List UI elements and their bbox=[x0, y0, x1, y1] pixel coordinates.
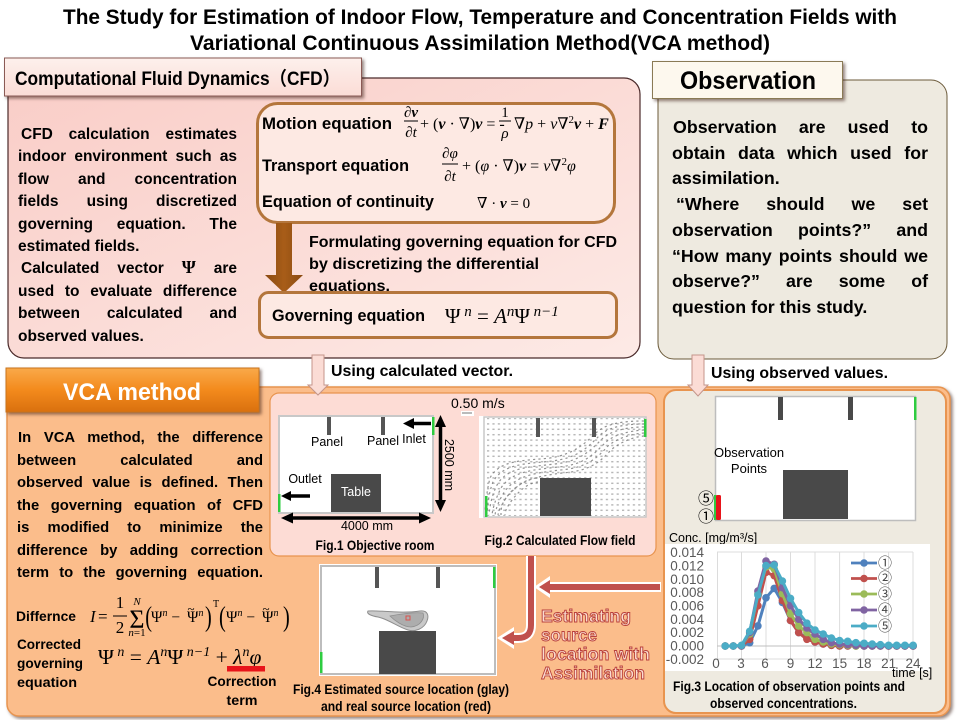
line chart: concentrations: 0.000 bbox=[670, 638, 704, 654]
text block: CFD description: flow and concentration bbox=[18, 171, 237, 188]
arrow: calculated vector bbox=[308, 355, 328, 395]
transport equation: + (φ · ∇)v = ν∇ bbox=[462, 158, 561, 175]
axis title: time: time [s] bbox=[892, 666, 932, 680]
motion equation: + F bbox=[585, 116, 609, 133]
arrow: observation to VCA bbox=[534, 576, 661, 598]
equation: corrected governing: n−1 bbox=[183, 645, 210, 660]
text block: observation description bbox=[672, 117, 928, 317]
text block: observation description: question for this study. bbox=[672, 297, 867, 317]
text block: VCA description: In VCA method, the difference bbox=[18, 430, 263, 446]
figure 3 room with observation points: Observation bbox=[714, 445, 784, 460]
heading: CFD bbox=[4, 58, 362, 96]
label: estimating source location: Assimilation bbox=[541, 663, 645, 683]
series 2 bbox=[725, 572, 913, 646]
figure 1: objective room: Inlet bbox=[402, 432, 426, 446]
heading: observation: Observation bbox=[680, 67, 816, 95]
highlight: correction term bar bbox=[227, 666, 265, 672]
equation: difference I: n=1 bbox=[128, 627, 146, 639]
line chart: concentrations: 6 bbox=[761, 656, 769, 671]
figure 2: calculated flow field bbox=[479, 416, 646, 548]
equation: difference I: Σ bbox=[129, 605, 145, 634]
text block: observation description: assimilation. bbox=[672, 168, 780, 188]
text block: CFD description: Calculated vector Ψ are bbox=[21, 257, 237, 277]
figure 3 room with observation points: Points bbox=[731, 461, 768, 476]
equation: difference I: n bbox=[162, 608, 167, 619]
text block: CFD description bbox=[18, 126, 237, 345]
series 1 bbox=[725, 588, 913, 646]
label: corrected governing equation: Corrected bbox=[17, 637, 81, 652]
text block: observation description: “How many points should we bbox=[672, 246, 928, 266]
line chart: concentrations: 24 bbox=[905, 656, 921, 671]
title: The Study for Estimation of Indoor Flow, Temperature and Concentration Fields with bbox=[63, 6, 897, 29]
governing equation box: Governing equation bbox=[272, 307, 425, 325]
label: estimating source location: location with bbox=[541, 644, 650, 664]
series 5 bbox=[725, 565, 913, 646]
figure 1: objective room: Fig.1 Objective room bbox=[316, 537, 434, 553]
line chart: concentrations bbox=[665, 544, 930, 671]
figure 2: calculated flow field: Fig.2 Calculated Flow field bbox=[484, 532, 636, 548]
transport equation: φ bbox=[567, 158, 576, 175]
equation: difference I: 1 bbox=[116, 593, 124, 612]
text: formulating governing equation: equations. bbox=[309, 278, 390, 295]
text block: VCA description bbox=[17, 430, 263, 581]
text block: observation description: observe?” are some of bbox=[672, 271, 928, 291]
transport equation: 2 bbox=[561, 156, 567, 168]
heading: VCA method bbox=[6, 368, 259, 412]
equation: difference I: Ψ bbox=[226, 609, 237, 626]
legend: ⑤ bbox=[878, 616, 892, 636]
scale: 0.50 m/s: 0.50 m/s bbox=[451, 395, 505, 411]
figure 1: objective room: Panel bbox=[367, 434, 399, 448]
motion equation: ∇p + ν∇ bbox=[514, 116, 568, 133]
equation: difference I: Ψ bbox=[262, 609, 273, 626]
label: estimating source location bbox=[541, 606, 650, 683]
equation: difference I: ~ bbox=[262, 601, 270, 616]
legend: ③ bbox=[878, 584, 892, 604]
figure 4: estimated source location: and real source location (red) bbox=[321, 698, 491, 714]
text block: CFD description: between calculated and bbox=[18, 305, 237, 322]
text block: CFD description: governing equation. The bbox=[18, 216, 237, 233]
figure 1: objective room: 2500 mm bbox=[442, 439, 456, 491]
equation: corrected governing: λ bbox=[232, 645, 242, 669]
label: corrected governing equation bbox=[17, 637, 83, 690]
line chart: concentrations: 0 bbox=[712, 656, 720, 671]
line chart: concentrations: 0.002 bbox=[670, 625, 704, 640]
equation: difference I: ~ bbox=[188, 601, 195, 616]
arrow: observed values bbox=[688, 355, 708, 396]
equation: difference I: T bbox=[213, 599, 219, 610]
motion equation: v bbox=[574, 116, 582, 133]
equation: difference I: = bbox=[98, 607, 108, 626]
text block: CFD description: CFD calculation estimates bbox=[21, 126, 237, 143]
line chart: concentrations: 21 bbox=[881, 656, 896, 671]
caption: figure 3: Fig.3 Location of observation points and bbox=[673, 678, 905, 694]
series 3 bbox=[725, 567, 913, 646]
motion equation: 1 bbox=[501, 105, 509, 121]
text block: observation description: Observation are used to bbox=[673, 117, 928, 137]
equation of continuity: ∇ · v = 0 bbox=[477, 196, 530, 212]
equation: difference I: I bbox=[89, 607, 97, 626]
equation of continuity: Equation of continuity bbox=[262, 193, 435, 211]
figure 1: objective room: Table bbox=[341, 485, 371, 499]
line chart: concentrations: 0.014 bbox=[670, 545, 704, 560]
line chart: concentrations: 0.010 bbox=[670, 572, 704, 587]
line chart: concentrations: 12 bbox=[807, 656, 823, 671]
panel: VCA background bbox=[7, 387, 950, 716]
line chart: concentrations: 0.008 bbox=[670, 585, 704, 600]
label: corrected governing equation: governing bbox=[17, 656, 83, 671]
arrow: discretizing bbox=[265, 223, 303, 293]
label: corrected governing equation: equation bbox=[17, 675, 77, 690]
line chart: concentrations: 9 bbox=[787, 656, 794, 671]
panel: CFD background bbox=[8, 78, 640, 358]
text block: CFD description: estimated fields. bbox=[18, 238, 139, 255]
governing equation box: = bbox=[472, 304, 494, 328]
governing equation box: Ψ bbox=[514, 304, 530, 328]
motion equation bbox=[262, 105, 609, 142]
line chart: concentrations: 0.006 bbox=[670, 598, 704, 614]
governing equation box: n−1 bbox=[530, 304, 559, 320]
equation: difference I: ) bbox=[205, 602, 212, 633]
equation: corrected governing: A bbox=[145, 645, 161, 669]
text block: CFD description: indoor environment such as bbox=[18, 148, 237, 165]
motion equation: 2 bbox=[568, 114, 574, 126]
series 4 bbox=[725, 561, 913, 646]
equation: corrected governing: Ψ bbox=[167, 645, 183, 669]
title: Variational Continuous Assimilation Method(VCA method) bbox=[190, 32, 770, 55]
equation: difference I: − bbox=[167, 609, 180, 626]
text block: observation description: obtain data which used for bbox=[672, 143, 928, 163]
governing equation box: A bbox=[492, 304, 507, 328]
equation: difference I bbox=[89, 593, 290, 639]
equation: difference I: Ψ bbox=[151, 609, 162, 626]
equation: difference I: Ψ bbox=[187, 609, 198, 626]
figure 4: estimated source location: Fig.4 Estimated source location (glay) bbox=[293, 681, 509, 697]
equation: difference I: ) bbox=[283, 602, 290, 633]
text block: VCA description: is modified to minimize the bbox=[17, 520, 263, 536]
label: correction term bbox=[208, 674, 276, 708]
text: formulating governing equation: Formulating governing equation for CFD bbox=[309, 234, 617, 251]
legend: ① bbox=[878, 553, 892, 573]
estimated source blob bbox=[368, 611, 428, 631]
figure 3 room with observation points: ① bbox=[698, 503, 714, 527]
label: correction term: Correction bbox=[208, 674, 276, 689]
motion equation: ∂v bbox=[404, 105, 418, 121]
figure 3 room with observation points: ⑤ bbox=[698, 485, 714, 509]
heading: CFD: Computational Fluid Dynamics（CFD） bbox=[15, 68, 340, 90]
equation: corrected governing: Ψ bbox=[98, 645, 114, 669]
equation: difference I: ( bbox=[145, 602, 152, 633]
line chart: concentrations: 3 bbox=[737, 656, 745, 671]
label: using calculated vector: Using calculated vector. bbox=[331, 363, 513, 380]
text block: observation description: “Where should we set bbox=[676, 194, 928, 214]
transport equation: Transport equation bbox=[262, 157, 409, 175]
line chart: concentrations: 18 bbox=[856, 656, 872, 671]
panel: figure 3 bbox=[664, 390, 946, 713]
equation: difference I: 2 bbox=[116, 618, 124, 637]
equation: corrected governing: = bbox=[124, 645, 147, 669]
caption: figure 3: observed concentrations. bbox=[710, 695, 857, 711]
label: correction term: term bbox=[226, 693, 258, 708]
equation: difference I: − bbox=[242, 609, 255, 626]
panel: observation background bbox=[658, 80, 947, 359]
text block: VCA description: observed value is defined. Then bbox=[17, 475, 263, 491]
transport equation: ∂t bbox=[444, 169, 457, 185]
text: formulating governing equation: by discretizing the differential bbox=[309, 256, 539, 273]
arrow: assimilation to source location bbox=[497, 556, 531, 649]
transport equation: ∂φ bbox=[442, 146, 458, 162]
text block: VCA description: difference by adding correction bbox=[17, 542, 263, 558]
equation: difference I: N bbox=[132, 596, 141, 608]
governing equation box: Ψ bbox=[445, 304, 460, 328]
text block: CFD description: fields using discretized bbox=[18, 193, 237, 210]
motion equation: ∂t bbox=[405, 125, 418, 141]
text block: observation description: observation points?” and bbox=[672, 220, 928, 240]
line chart: concentrations: 0.012 bbox=[670, 558, 704, 574]
axis title: concentration: Conc. [mg/m³/s] bbox=[669, 531, 757, 545]
panel: figures 1 and 2 bbox=[270, 393, 656, 556]
governing equation box bbox=[260, 292, 616, 338]
legend bbox=[851, 553, 892, 636]
equation: difference I: n bbox=[198, 608, 203, 619]
text: formulating governing equation bbox=[309, 234, 617, 295]
heading: observation bbox=[652, 62, 842, 98]
legend: ④ bbox=[878, 600, 892, 620]
label: using observed values: Using observed values. bbox=[711, 365, 888, 382]
equation: difference I: n bbox=[237, 608, 242, 619]
equation: corrected governing: n bbox=[114, 645, 124, 660]
line chart: concentrations: 15 bbox=[832, 656, 847, 671]
governing equation box: n bbox=[460, 304, 472, 320]
equation: corrected governing: n bbox=[160, 645, 167, 660]
text block: VCA description: between calculated and bbox=[17, 452, 263, 468]
motion equation: + (v · ∇)v = - bbox=[420, 116, 505, 133]
figure 1: objective room: Panel bbox=[311, 435, 343, 449]
figure 3 room with observation points bbox=[698, 396, 916, 527]
line chart: concentrations: 0.004 bbox=[670, 612, 704, 627]
heading: VCA method: VCA method bbox=[63, 379, 201, 406]
label: estimating source location: Estimating bbox=[541, 606, 631, 626]
motion equation: Motion equation bbox=[262, 115, 392, 133]
governing equation box: n bbox=[507, 304, 514, 320]
legend: ② bbox=[878, 568, 892, 588]
text block: CFD description: observed values. bbox=[18, 328, 144, 345]
title bbox=[63, 6, 897, 55]
figure 1: objective room bbox=[278, 415, 456, 553]
figure 1: objective room: 4000 mm bbox=[341, 519, 393, 533]
equation: corrected governing: n bbox=[242, 645, 249, 660]
equation: difference I: ( bbox=[219, 602, 226, 633]
text block: CFD description: used to evaluate difference bbox=[18, 283, 237, 300]
label: difference: Differnce bbox=[16, 609, 77, 624]
equation: difference I: n bbox=[273, 608, 278, 619]
figure 4: estimated source location bbox=[293, 564, 509, 714]
caption: figure 3 bbox=[673, 678, 905, 711]
text block: VCA description: term to the governing equation. bbox=[17, 565, 263, 581]
equation: corrected governing: + bbox=[210, 645, 233, 669]
motion equation: ρ bbox=[500, 126, 509, 142]
equation: corrected governing: φ bbox=[249, 645, 261, 669]
equations box bbox=[258, 104, 614, 222]
text block: VCA description: the governing equation of CFD bbox=[17, 498, 263, 514]
line chart: concentrations: -0.002 bbox=[666, 652, 704, 667]
equation of continuity bbox=[262, 193, 530, 212]
label: estimating source location: source bbox=[541, 625, 597, 645]
transport equation bbox=[262, 146, 576, 185]
figure 1: objective room: Outlet bbox=[288, 472, 322, 486]
